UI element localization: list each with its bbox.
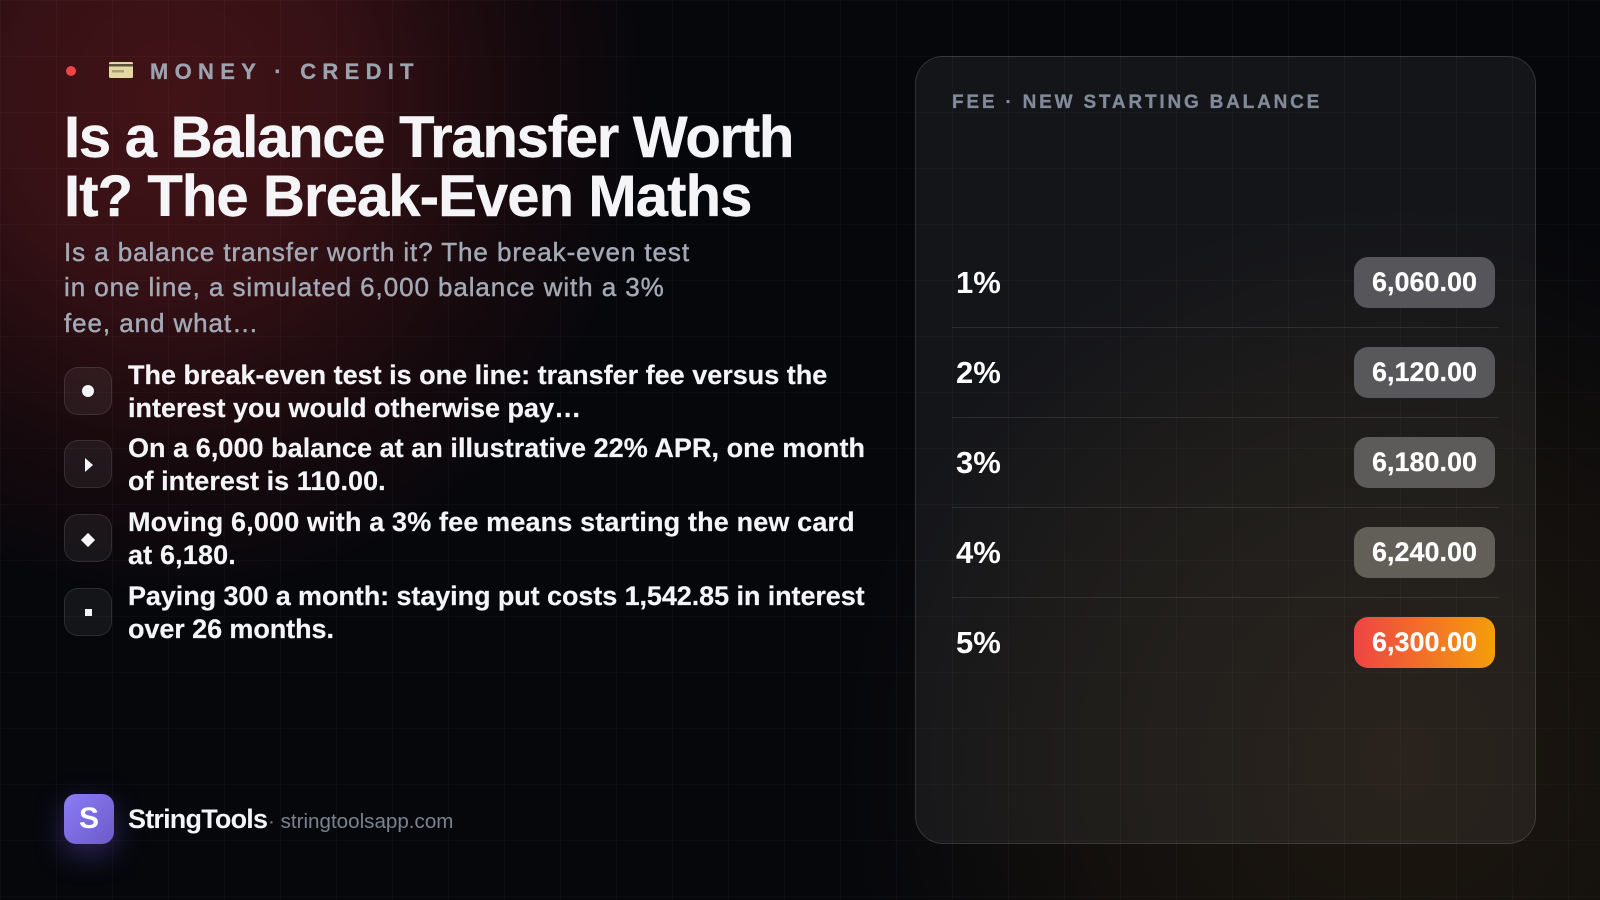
row: 5% [956,617,1495,668]
row: 3%: 3% [956,445,1001,480]
eyebrow [66,59,420,84]
row: 1% [952,257,1499,328]
bullet 4 [64,581,865,644]
bullet 3 [64,507,855,570]
bullet text: Moving 6,000 with a 3% fee means starting the new card [128,507,855,537]
bullet text [128,507,855,570]
title: It? The Break-Even Maths [64,164,751,228]
footer brand [48,788,453,870]
icon: red dot [66,66,76,76]
row: 3% [952,437,1499,508]
row: 2%: 6,120.00 [1372,357,1477,387]
icon: circle [64,367,112,415]
row: 5%: 5% [956,625,1001,660]
bullet text: On a 6,000 balance at an illustrative 22% APR, one month [128,433,865,463]
row: 1%: 1% [956,265,1001,300]
icon: square [64,588,112,636]
bullet text: over 26 months. [128,614,334,644]
bullet text: Paying 300 a month: staying put costs 1,542.85 in interest [128,581,865,611]
brand url: · stringtoolsapp.com [268,810,453,833]
bullet text [128,581,865,644]
brand name: StringTools [128,804,267,834]
icon: credit card [109,62,133,78]
panel heading: FEE · NEW STARTING BALANCE [952,92,1322,112]
subtitle: fee, and what… [64,308,259,338]
row: 1%: 6,060.00 [1372,267,1477,297]
icon: logo [64,794,114,844]
subtitle [64,236,690,338]
eyebrow text: MONEY · CREDIT [150,59,420,84]
bullet 2 [64,433,865,496]
icon: logo: S [79,802,99,835]
row: 2% [952,347,1499,418]
bullet text: of interest is 110.00. [128,466,386,496]
row: 2%: 2% [956,355,1001,390]
title [64,104,793,228]
panel: fee table [915,56,1536,844]
bullet text: interest you would otherwise pay… [128,393,581,423]
bullet text: The break-even test is one line: transfer fee versus the [128,360,827,390]
icon: diamond [64,514,112,562]
row: 3%: 6,180.00 [1372,447,1477,477]
title: Is a Balance Transfer Worth [64,104,793,170]
bullet text [128,360,827,423]
row: 4%: 6,240.00 [1372,537,1477,567]
icon: triangle [64,440,112,488]
row: 5%: 6,300.00 [1372,627,1477,657]
subtitle: Is a balance transfer worth it? The break-even test [64,236,690,266]
bullet text: at 6,180. [128,540,236,570]
bullet text [128,433,865,496]
row: 4% [952,527,1499,598]
bullet 1 [64,360,827,423]
subtitle: in one line, a simulated 6,000 balance with a 3% [64,272,665,302]
row: 4%: 4% [956,535,1001,570]
